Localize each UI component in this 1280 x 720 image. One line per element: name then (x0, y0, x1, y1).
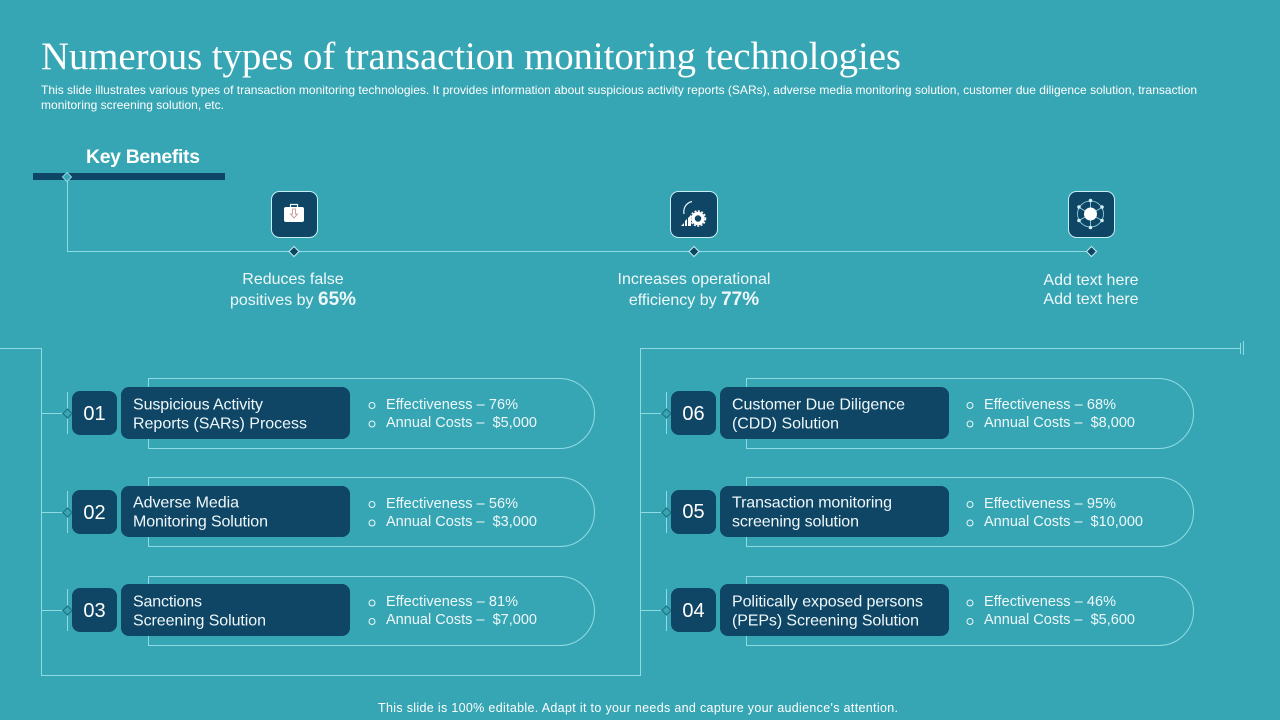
item 05: Effectiveness – 95% (984, 496, 1116, 512)
benefit: increases operational efficiency: Increases operational (618, 271, 770, 288)
item 04: Effectiveness – 46% (984, 594, 1116, 610)
item 01: Reports (SARs) Process (133, 416, 307, 432)
item 02 (42, 478, 594, 546)
item 05: Annual Costs – $10,000 (984, 514, 1143, 530)
item 04: Politically exposed persons (732, 594, 923, 610)
item 03: Screening Solution (133, 612, 266, 630)
item 03: 03 (83, 600, 106, 622)
item 04: Annual Costs – $5,600 (984, 612, 1135, 628)
heading: key benefits: Key Benefits (86, 146, 200, 168)
benefit: placeholder text: Add text here (1043, 291, 1139, 308)
item 06: Effectiveness – 68% (984, 397, 1116, 413)
item 03: Effectiveness – 81% (386, 594, 518, 610)
item 02: Monitoring Solution (133, 514, 268, 530)
item 05: Transaction monitoring (732, 494, 892, 512)
item 04: (PEPs) Screening Solution (732, 612, 919, 630)
benefit: reduces false positives (230, 271, 356, 310)
subtitle description (41, 83, 1197, 112)
item 06 (640, 378, 1194, 448)
item 04: 04 (682, 600, 705, 622)
benefit: increases operational efficiency (618, 271, 770, 310)
item 06: 06 (682, 403, 705, 425)
item 03 (42, 576, 594, 646)
item 01: 01 (83, 403, 106, 425)
footer note: This slide is 100% editable. Adapt it to your needs and capture your audience's attention. (378, 701, 898, 715)
subtitle description: monitoring screening solution, etc. (41, 98, 224, 112)
subtitle description: This slide illustrates various types of transaction monitoring technologies. It provides information about suspicious activity reports (SARs), adverse media monitoring solution, customer due diligence solution, transaction (41, 83, 1197, 97)
title: Numerous types of transaction monitoring technologies (41, 35, 901, 78)
item 01: Annual Costs – $5,000 (386, 415, 537, 431)
benefit: reduces false positives: positives by 65% (230, 289, 356, 310)
benefit: placeholder text: Add text here (1043, 272, 1139, 289)
item 02: Adverse Media (133, 494, 239, 512)
icon: gear with chart (670, 192, 718, 256)
item 03: Sanctions (133, 594, 202, 610)
item 05: 05 (682, 501, 705, 523)
item 06: Annual Costs – $8,000 (984, 415, 1135, 431)
item 05: screening solution (732, 514, 859, 530)
benefit: increases operational efficiency: efficiency by 77% (629, 289, 759, 310)
item 01: Suspicious Activity (133, 396, 263, 414)
benefits timeline connector (68, 181, 1088, 252)
item 06: Customer Due Diligence (732, 396, 905, 414)
item 06: (CDD) Solution (732, 416, 839, 432)
item 02: Effectiveness – 56% (386, 496, 518, 512)
item 01 (42, 378, 594, 448)
heading: key benefits (33, 146, 225, 182)
item 05 (640, 478, 1194, 546)
benefit: placeholder text (1043, 272, 1139, 308)
left bracket connector (0, 341, 1244, 676)
item 01: Effectiveness – 76% (386, 397, 518, 413)
icon: network hub (1068, 192, 1114, 256)
benefit: reduces false positives: Reduces false (242, 271, 344, 288)
item 02: 02 (83, 502, 106, 524)
item 02: Annual Costs – $3,000 (386, 514, 537, 530)
item 03: Annual Costs – $7,000 (386, 612, 537, 628)
icon: briefcase with down arrow (272, 192, 318, 256)
item 04 (640, 576, 1194, 646)
